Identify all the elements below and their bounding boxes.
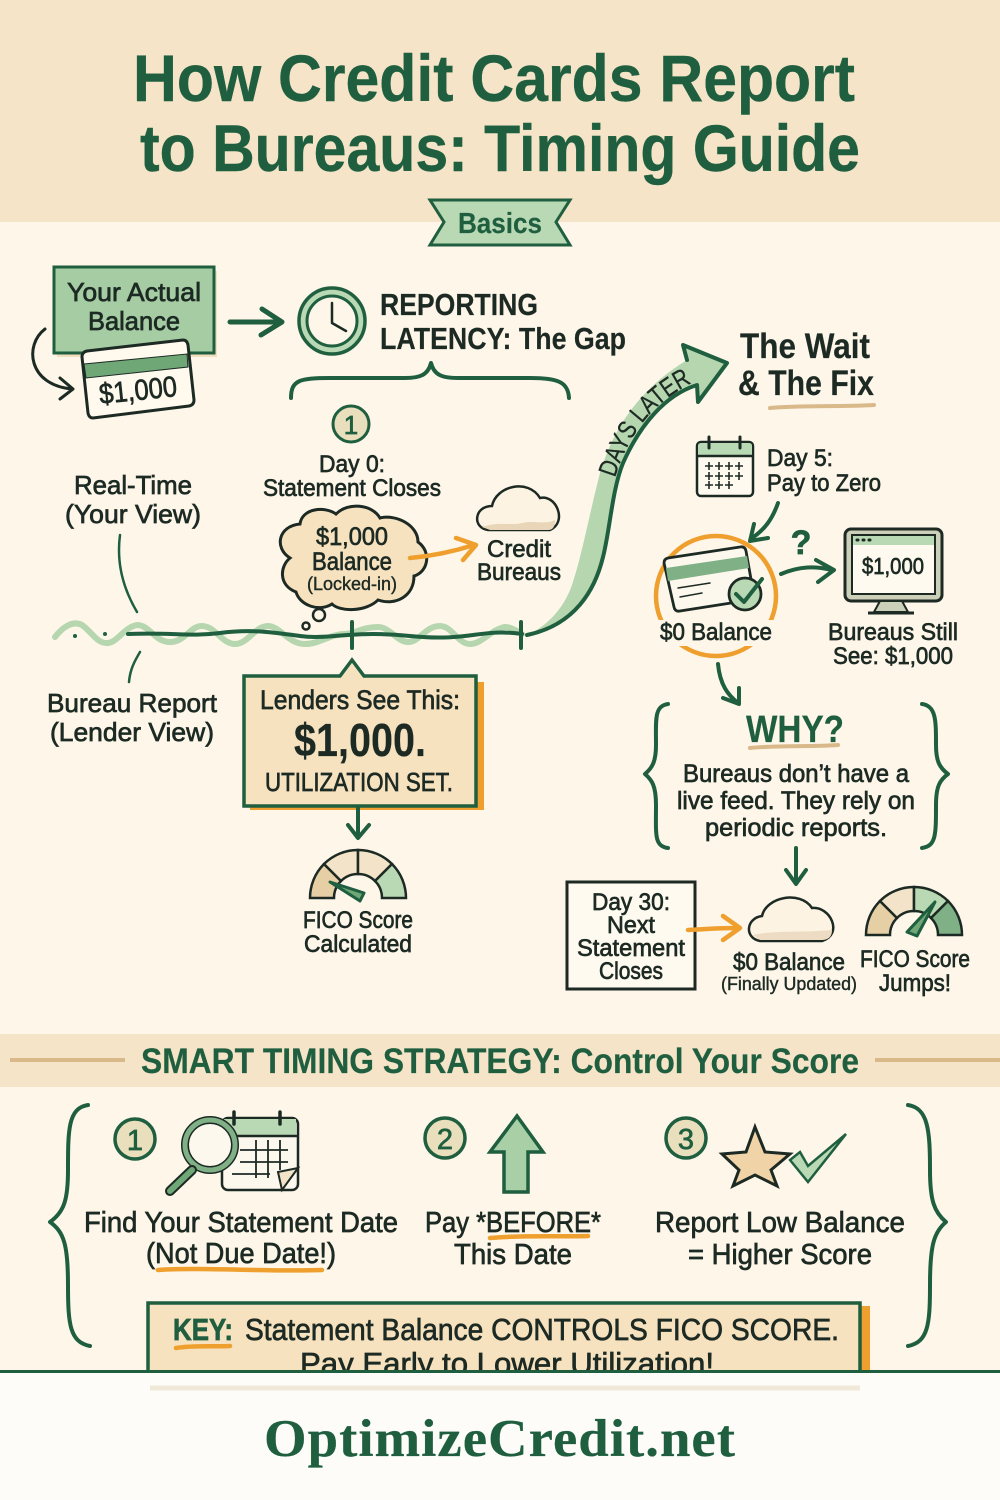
step 1: day 0: 1 [344,410,358,440]
arrow: to bureaus [410,538,476,560]
gauge: FICO jumps: Jumps! [879,970,951,997]
brace: latency [291,363,569,398]
label: bureaus still see [828,619,958,670]
box: day 30 [567,882,695,989]
callout: lenders see this: $1,000. [294,714,426,766]
panel: your actual balance [33,267,217,418]
arrow: loop to card [33,329,73,399]
panel: why [645,704,948,848]
icon: monitor: $1,000 [862,553,924,579]
callout: key: Pay Early to Lower Utilization! [300,1346,714,1381]
step 3: report low balance: = Higher Score [688,1239,872,1271]
label: bureau report: (Lender View) [50,717,214,747]
gauge: FICO score calculated: FICO Score [303,907,413,934]
arrow: days later: DAYS LATER [598,370,692,476]
arrow: to latency [230,309,282,335]
step 1: find date: Find Your Statement Date [84,1207,398,1239]
box: day 30: Statement [577,935,685,962]
arrow: question to monitor: ? [791,524,811,562]
title: to Bureaus: Timing Guide [140,111,860,185]
cloud: locked-in balance: (Locked-in) [307,574,397,594]
step 2: pay before: This Date [454,1239,572,1271]
panel: your actual balance: Your Actual [67,277,201,307]
icon: cloud bureaus [477,486,561,586]
icon: credit card $1,000: $1,000 [98,371,179,411]
icon: monitor [845,529,942,613]
callout: lenders see this: UTILIZATION SET. [265,767,453,797]
arrow: to why [718,664,739,704]
timeline [55,622,522,648]
label: zero balance: $0 Balance [660,619,772,646]
callout: key [148,1303,870,1396]
step 1: day 0 [263,406,441,502]
cloud: locked-in balance: Balance [312,548,392,576]
step 2: pay before: Pay *BEFORE* [425,1207,601,1239]
heading: reporting latency: LATENCY: The Gap [380,321,626,356]
gauge: FICO jumps [860,887,970,997]
heading: the wait and the fix: & The Fix [738,364,874,403]
gauge: FICO score calculated [303,850,413,958]
label: bureau report: Bureau Report [47,688,218,718]
label: bureaus still see: See: $1,000 [833,643,953,670]
arrow: to FICO [348,808,369,838]
icon: credit card $1,000 [82,340,194,418]
cloud: locked-in balance: $1,000 [316,523,388,551]
footer [0,1371,1000,1500]
heading: reporting latency: REPORTING [380,287,538,322]
label: day 5 [767,445,881,497]
heading: reporting latency [380,287,626,356]
arrow: question to monitor [781,524,834,582]
icon: magnifier and calendar [170,1112,298,1191]
arrow: orange to cloud [688,916,740,940]
step 2: pay before: 2 [437,1124,453,1156]
cloud: locked-in balance [280,506,427,610]
arrow: days later [525,342,730,637]
heading: the wait and the fix: The Wait [740,327,870,366]
arrow: to cloud [786,848,806,884]
step 1: day 0: Statement Closes [263,475,441,502]
gauge: FICO jumps: FICO Score [860,946,970,973]
callout: lenders see this [244,660,484,810]
label: day 5: Pay to Zero [767,470,881,497]
step 3: report low balance: 3 [678,1124,694,1156]
box: day 30: Day 30: [592,889,670,916]
box: day 30: Next [607,912,655,939]
step 2: pay before [425,1116,601,1271]
badge: Basics: Basics [458,208,542,240]
callout: lenders see this: Lenders See This: [260,685,460,715]
brace: strategy right [908,1105,946,1346]
title: How Credit Cards Report [133,41,855,115]
label: credit bureaus: Credit [487,536,551,563]
step 3: report low balance [655,1118,905,1271]
label: real-time: (Your View) [65,499,201,529]
step 1: day 0: Day 0: [319,451,385,478]
panel: why: WHY? [746,709,844,751]
label: zero finally updated [721,949,857,994]
callout: key: KEY: [173,1312,233,1347]
callout: key: Statement Balance CONTROLS FICO SCORE. [245,1312,839,1347]
step 1: find date: (Not Due Date!) [146,1238,336,1270]
label: bureau report [47,652,218,747]
footer: OptimizeCredit.net [264,1410,736,1468]
box: day 30: Closes [599,958,663,985]
thought bubbles [302,609,325,630]
panel: why: periodic reports. [705,814,887,842]
icon: clock [299,288,365,354]
band: smart timing strategy [0,1034,1000,1087]
step 1: find date: 1 [127,1125,143,1157]
label: zero finally updated: (Finally Updated) [721,974,857,994]
title [133,41,860,185]
panel: your actual balance: Balance [88,306,180,336]
badge: Basics [430,200,570,245]
label: bureaus still see: Bureaus Still [828,619,958,646]
label: credit bureaus [477,536,561,586]
arrow: to card [750,503,778,541]
label: zero finally updated: $0 Balance [733,949,845,976]
step 1: find date [84,1112,398,1270]
gauge: FICO score calculated: Calculated [304,931,412,958]
band: smart timing strategy: SMART TIMING STRATEGY: Control Your Score [141,1042,859,1081]
label: credit bureaus: Bureaus [477,559,561,586]
panel: why: live feed. They rely on [677,787,915,815]
label: real-time [65,470,201,612]
icon: cloud zero balance [749,898,833,941]
icon: calendar [697,437,753,496]
panel: why: Bureaus don’t have a [683,760,909,788]
step 3: report low balance: Report Low Balance [655,1207,905,1239]
icon: paid card with orange circle [656,536,776,656]
label: real-time: Real-Time [74,470,192,500]
label: day 5: Day 5: [767,445,833,472]
brace: strategy left [50,1105,90,1346]
heading: the wait and the fix [738,327,874,408]
